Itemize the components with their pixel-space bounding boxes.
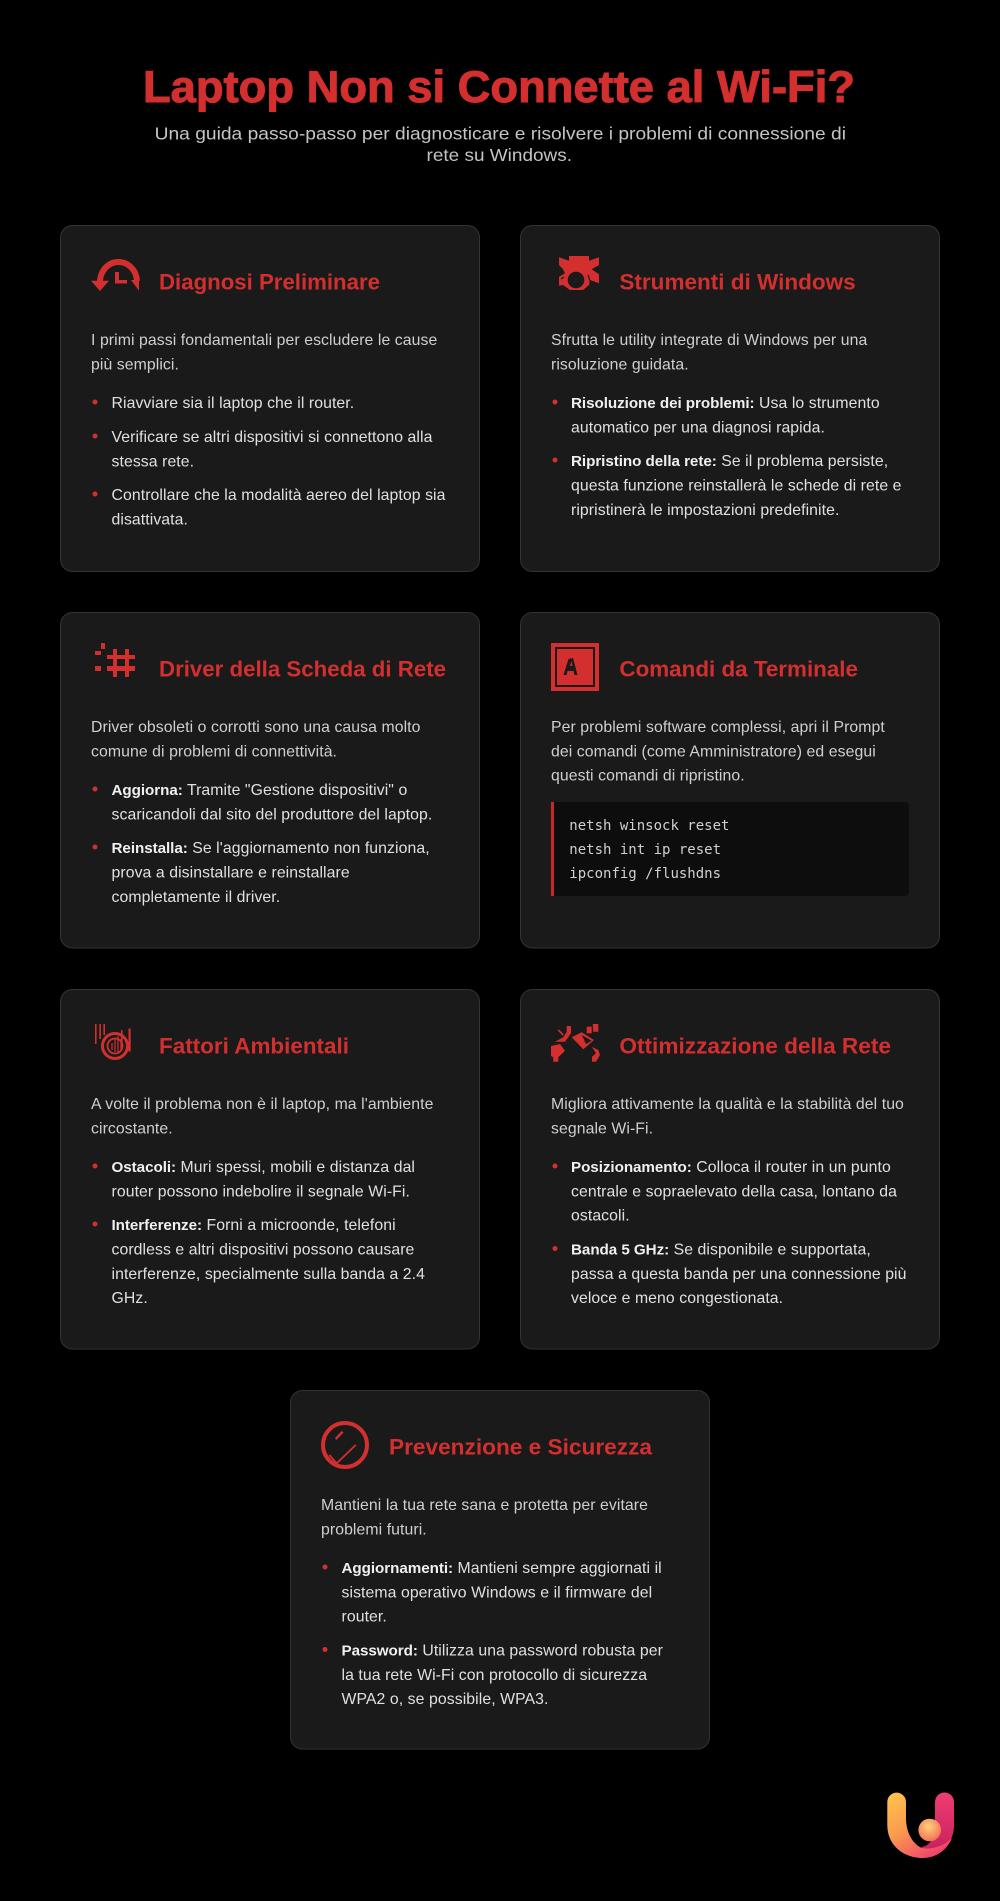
bullet list: Aggiorna: Tramite "Gestione dispositivi" o <box>112 782 407 799</box>
heading: Prevenzione e Sicurezza <box>389 1434 653 1460</box>
icon: history clock arrow <box>91 262 139 291</box>
intro text: risoluzione guidata. <box>551 356 689 373</box>
intro text: problemi futuri. <box>321 1521 427 1538</box>
icon: router tools <box>551 1024 600 1062</box>
intro text: dei comandi (come Amministratore) ed esegui <box>551 743 876 760</box>
panel: Diagnosi Preliminare <box>60 226 480 572</box>
intro text: questi comandi di ripristino. <box>551 768 745 785</box>
bullet list: Ostacoli: Muri spessi, mobili e distanza dal <box>112 1159 415 1176</box>
panel: Strumenti di Windows <box>520 226 940 572</box>
intro text: comune di problemi di connettività. <box>91 743 337 760</box>
bullet list: Reinstalla: Se l'aggiornamento non funziona, <box>112 840 430 857</box>
code block: ipconfig /flushdns <box>569 866 721 882</box>
icon: tools <box>559 256 599 290</box>
bullet list: passa a questa banda per una connessione più <box>571 1266 907 1283</box>
intro text: I primi passi fondamentali per escludere le cause <box>91 332 437 349</box>
intro text: segnale Wi-Fi. <box>551 1120 653 1137</box>
intro text: A volte il problema non è il laptop, ma l'ambiente <box>91 1096 434 1113</box>
bullet list: veloce e meno congestionata. <box>571 1290 783 1307</box>
intro text: circostante. <box>91 1120 173 1137</box>
bullet list: questa funzione reinstallerà le schede di rete e <box>571 478 902 494</box>
bullet list: completamente il driver. <box>112 889 280 906</box>
logo <box>887 1793 954 1858</box>
title: Laptop Non si Connette al Wi-Fi? <box>143 62 855 112</box>
intro text: Mantieni la tua rete sana e protetta per evitare <box>321 1497 648 1514</box>
bullet list: cordless e altri dispositivi possono causare <box>112 1242 415 1258</box>
code block: netsh int ip reset <box>569 842 721 858</box>
bullet list: sistema operativo Windows e il firmware del <box>342 1584 652 1601</box>
code block <box>551 802 909 896</box>
intro text <box>91 332 437 373</box>
bullet list: Risoluzione dei problemi: Usa lo strumento <box>571 395 880 412</box>
bullet list: router. <box>342 1609 387 1626</box>
intro text: Sfrutta le utility integrate di Windows per una <box>551 332 867 349</box>
bullet list: Verificare se altri dispositivi si connettono alla <box>112 429 433 446</box>
intro text <box>91 719 421 760</box>
bullet list <box>552 395 902 519</box>
bullet list <box>92 1159 425 1307</box>
intro text <box>551 332 867 373</box>
intro text: Driver obsoleti o corrotti sono una causa molto <box>91 719 421 736</box>
intro text <box>551 1096 904 1137</box>
bullet list <box>92 395 446 528</box>
bullet list: Posizionamento: Colloca il router in un punto <box>571 1159 891 1176</box>
heading: Strumenti di Windows <box>619 270 856 294</box>
intro text: Migliora attivamente la qualità e la stabilità del tuo <box>551 1096 904 1113</box>
heading: Fattori Ambientali <box>159 1034 349 1058</box>
panel: Fattori Ambientali <box>60 990 480 1349</box>
bullet list: WPA2 o, se possibile, WPA3. <box>342 1691 549 1708</box>
bullet list: router possono indebolire il segnale Wi-Fi. <box>112 1183 410 1200</box>
panel: Prevenzione e Sicurezza <box>290 1390 710 1749</box>
panel: Comandi da Terminale <box>520 612 940 948</box>
bullet list: la tua rete Wi-Fi con protocollo di sicurezza <box>342 1667 647 1684</box>
subtitle: rete su Windows. <box>426 145 572 165</box>
bullet list: Controllare che la modalità aereo del laptop sia <box>112 487 446 504</box>
heading: Comandi da Terminale <box>619 656 858 682</box>
icon: network grid <box>95 643 135 677</box>
bullet list: ripristinerà le impostazioni predefinite. <box>571 502 839 519</box>
bullet list <box>92 782 432 906</box>
intro text <box>91 1096 434 1137</box>
intro text: Per problemi software complessi, apri il Prompt <box>551 719 885 736</box>
icon: terminal window <box>551 643 599 691</box>
code block: netsh winsock reset <box>569 818 729 834</box>
bullet list: scaricandoli dal sito del produttore del laptop. <box>112 806 432 823</box>
bullet list: Password: Utilizza una password robusta per <box>342 1642 663 1660</box>
intro text <box>551 719 885 785</box>
bullet list: automatico per una diagnosi rapida. <box>571 419 825 436</box>
icon: signal interference <box>95 1024 131 1058</box>
bullet list: disattivata. <box>112 512 188 528</box>
bullet list: Interferenze: Forni a microonde, telefoni <box>112 1217 396 1234</box>
subtitle: Una guida passo-passo per diagnosticare e risolvere i problemi di connessione di <box>155 124 846 144</box>
bullet list: stessa rete. <box>112 453 194 470</box>
bullet list: ostacoli. <box>571 1208 630 1225</box>
heading: Driver della Scheda di Rete <box>159 656 446 682</box>
bullet list: Aggiornamenti: Mantieni sempre aggiornati il <box>342 1560 662 1577</box>
bullet list <box>552 1159 907 1307</box>
bullet list: prova a disinstallare e reinstallare <box>112 864 350 882</box>
bullet list: centrale e sopraelevato della casa, lontano da <box>571 1183 897 1200</box>
heading: Diagnosi Preliminare <box>159 270 380 294</box>
subtitle <box>155 124 846 165</box>
bullet list: Ripristino della rete: Se il problema persiste, <box>571 453 888 470</box>
intro text: più semplici. <box>91 356 179 373</box>
bullet list: GHz. <box>112 1290 148 1307</box>
bullet list <box>322 1560 663 1708</box>
icon: security circle <box>323 1423 367 1467</box>
bullet list: Riavviare sia il laptop che il router. <box>112 395 354 412</box>
intro text <box>321 1497 648 1538</box>
heading: Ottimizzazione della Rete <box>619 1034 891 1058</box>
panel: Driver della Scheda di Rete <box>60 612 480 948</box>
bullet list: interferenze, specialmente sulla banda a 2.4 <box>112 1266 425 1283</box>
panel: Ottimizzazione della Rete <box>520 990 940 1349</box>
bullet list: Banda 5 GHz: Se disponibile e supportata, <box>571 1242 871 1258</box>
